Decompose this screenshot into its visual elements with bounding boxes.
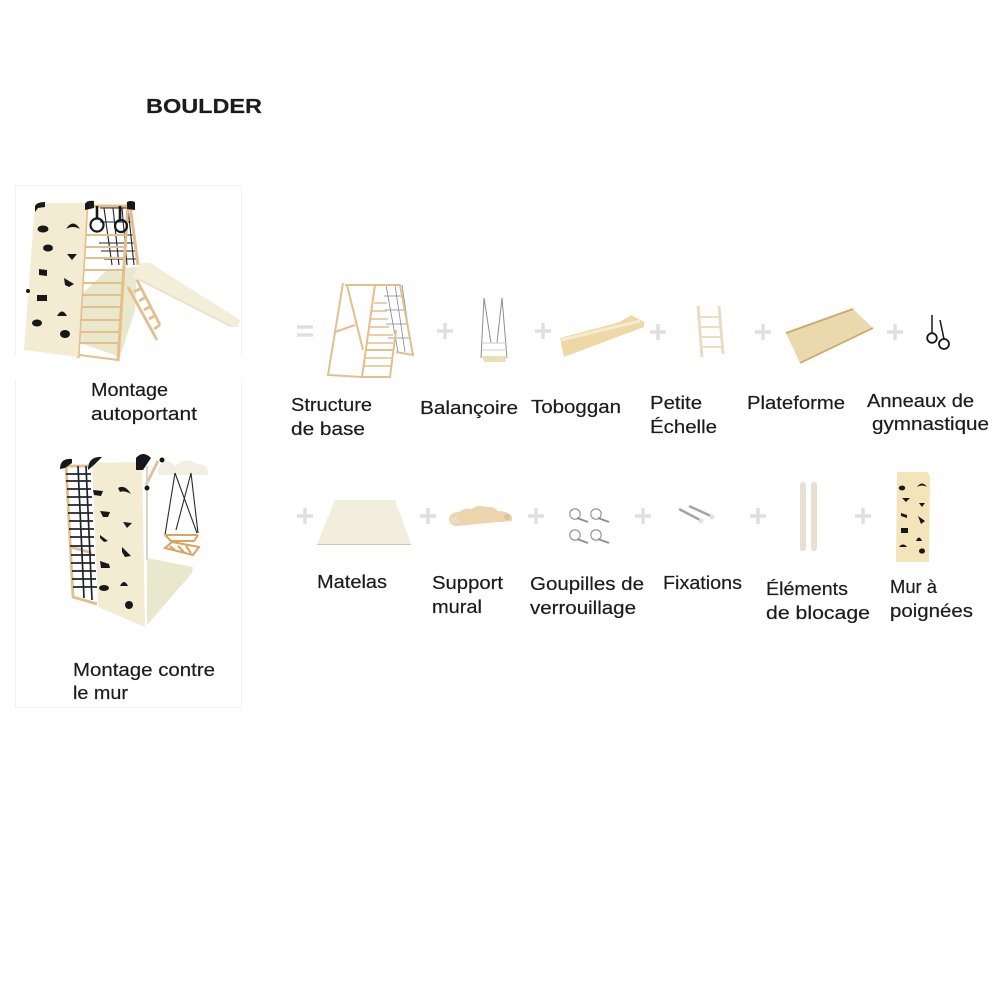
plus: [535, 323, 551, 339]
item: swing: [420, 298, 518, 418]
plus: [635, 508, 651, 524]
plus: [855, 508, 871, 524]
item: base structure: [291, 283, 413, 439]
climbing holds: [26, 201, 135, 338]
item: blocking elements: [766, 482, 870, 623]
item: blocking elements: Éléments: [766, 579, 848, 599]
label: wall mounted: [73, 660, 215, 703]
item: slide: [531, 315, 644, 417]
item: fixings: [663, 506, 742, 593]
item: small ladder: Petite: [650, 393, 702, 413]
plus: [528, 508, 544, 524]
item: wall support: Support: [432, 573, 503, 593]
item: small ladder: [650, 306, 723, 437]
item: swing: Balançoire: [420, 398, 518, 418]
item: slide: Toboggan: [531, 397, 621, 417]
gymnastic rings: [90, 206, 127, 232]
plus: [750, 508, 766, 524]
item: platform: [747, 309, 873, 413]
wall bracket: [158, 460, 208, 475]
plus: [297, 508, 313, 524]
item: wall support: [432, 506, 512, 617]
item: gymnastic rings: [867, 315, 989, 434]
item: wall with holds: [890, 472, 973, 621]
plus: [437, 323, 453, 339]
label: wall mounted: Montage contre: [73, 660, 215, 680]
item: fixings: Fixations: [663, 573, 742, 593]
title: BOULDER: [146, 96, 263, 118]
label: freestanding: Montage: [91, 380, 168, 400]
item: base structure: Structure: [291, 395, 372, 415]
label: freestanding: [91, 380, 197, 424]
item: wall with holds: Mur à: [890, 577, 938, 597]
swing: [165, 473, 199, 555]
item: mat: Matelas: [317, 572, 387, 592]
item: mat: [317, 500, 411, 592]
label: freestanding: autoportant: [91, 404, 197, 424]
item: platform: Plateforme: [747, 393, 845, 413]
item: locking pins: verrouillage: [530, 598, 636, 618]
item: locking pins: [530, 509, 644, 618]
illustration: freestanding assembly: [24, 201, 240, 361]
item: base structure: de base: [291, 419, 365, 439]
plus: [420, 508, 436, 524]
item: gymnastic rings: gymnastique: [872, 414, 989, 434]
plus: [887, 324, 903, 340]
item: gymnastic rings: Anneaux de: [867, 391, 974, 411]
equals sign: [297, 327, 313, 335]
item: small ladder: Échelle: [650, 417, 717, 437]
item: blocking elements: de blocage: [766, 603, 870, 623]
item: wall support: mural: [432, 597, 482, 617]
plus: [755, 324, 771, 340]
item: wall with holds: poignées: [890, 601, 973, 621]
plus: [650, 324, 666, 340]
illustration: wall assembly: [60, 454, 208, 627]
panel: assembly options: [16, 186, 242, 708]
item: locking pins: Goupilles de: [530, 574, 644, 594]
label: wall mounted: le mur: [73, 683, 128, 703]
